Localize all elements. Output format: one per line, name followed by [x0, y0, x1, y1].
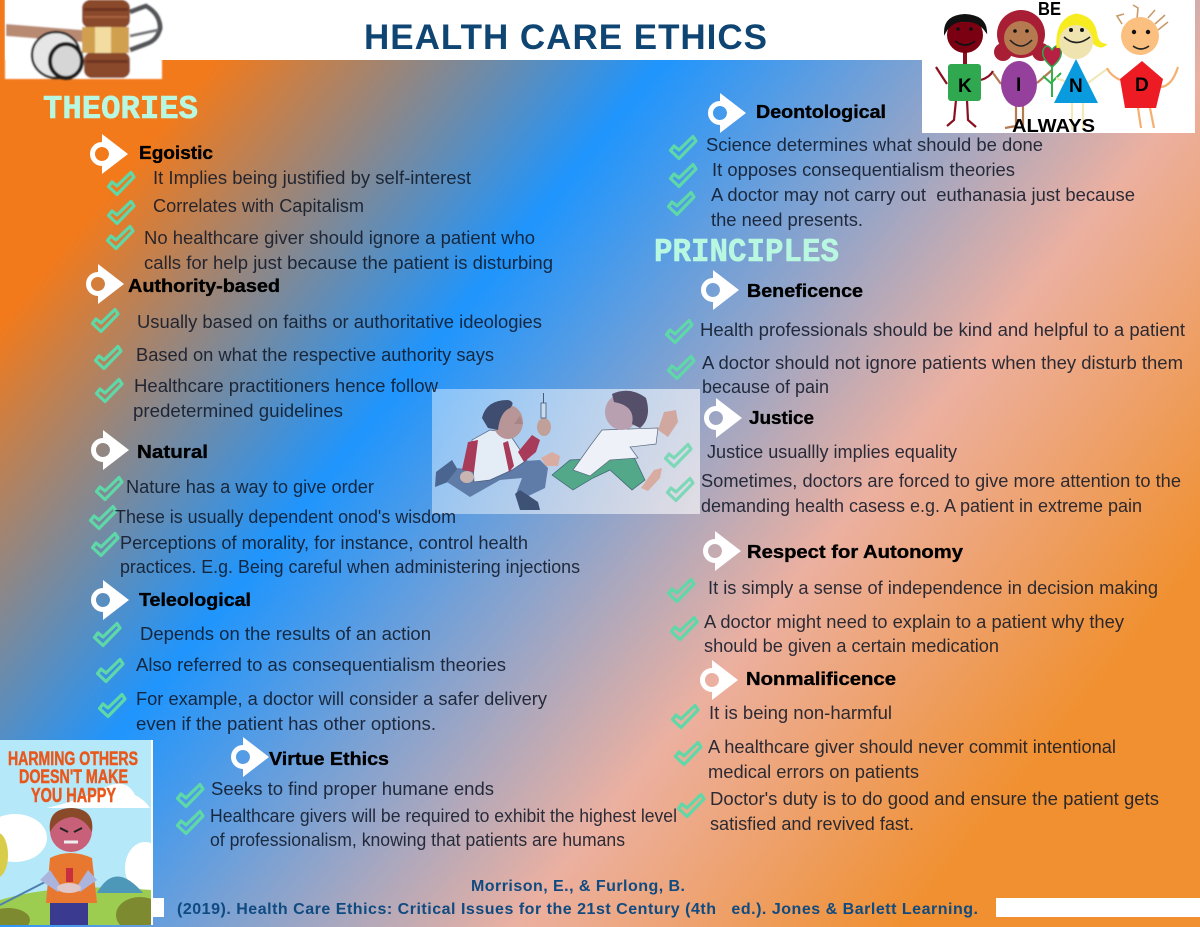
section: authority-based: Authority-based: [128, 276, 280, 296]
section: egoistic: Correlates with Capitalism: [153, 196, 364, 216]
figure I: I: [1016, 75, 1021, 96]
figure D: D: [1135, 75, 1149, 96]
section: respect for autonomy: Respect for Autonomy: [747, 542, 963, 562]
section: nonmalificence: A healthcare giver should never commit intentional: [708, 737, 1116, 757]
figure K: [936, 15, 993, 127]
section: justice: Justice usuallly implies equality: [707, 442, 957, 462]
section: authority-based: Based on what the respective authority says: [136, 345, 494, 365]
book title: HARMING OTHERS: [8, 749, 138, 770]
section: justice: Justice: [749, 408, 814, 428]
section: authority-based: Usually based on faiths or authoritative ideologies: [137, 312, 542, 332]
section: natural: These is usually dependent onod's wisdom: [115, 507, 456, 527]
section: deontological: Science determines what should be done: [706, 135, 1043, 155]
figure I: [993, 10, 1052, 128]
text: always: ALWAYS: [1012, 116, 1095, 136]
image: doctor chasing a patient with a syringe: [432, 389, 700, 514]
section: virtue ethics: [178, 737, 677, 850]
section: nonmalificence: medical errors on patients: [708, 762, 919, 782]
section: authority-based: predetermined guidelines: [133, 401, 343, 421]
section: respect for autonomy: A doctor might need to explain to a patient why they: [704, 612, 1124, 632]
doctor with syringe: [435, 393, 551, 510]
section: teleological: Depends on the results of an action: [140, 624, 431, 644]
bully boy: [40, 808, 97, 925]
section: beneficence: Health professionals should be kind and helpful to a patient: [700, 320, 1185, 340]
figure N: [1054, 15, 1107, 130]
section: authority-based: [88, 264, 542, 421]
section: virtue ethics: Healthcare givers will be required to exhibit the highest level: [210, 806, 677, 826]
section: egoistic: Egoistic: [139, 143, 213, 163]
section: nonmalificence: [672, 660, 1159, 834]
white header band: [5, 0, 922, 60]
footer citation: [177, 878, 978, 918]
footer citation: Morrison, E., & Furlong, B.: [471, 878, 685, 895]
section: deontological: Deontological: [756, 102, 886, 122]
section: respect for autonomy: It is simply a sense of independence in decision making: [708, 578, 1158, 598]
section: nonmalificence: Doctor's duty is to do good and ensure the patient gets: [710, 789, 1159, 809]
book title: DOESN'T MAKE: [19, 767, 128, 788]
section: egoistic: No healthcare giver should ignore a patient who: [144, 228, 535, 248]
section: teleological: [94, 580, 547, 734]
fleeing patient: [541, 391, 678, 491]
section: egoistic: calls for help just because the patient is disturbing: [144, 253, 553, 273]
section: nonmalificence: It is being non-harmful: [709, 703, 892, 723]
section: beneficence: Beneficence: [747, 281, 863, 301]
section: beneficence: A doctor should not ignore patients when they disturb them: [702, 353, 1183, 373]
section: nonmalificence: Nonmalificence: [746, 669, 896, 689]
figure D: [1107, 5, 1178, 128]
section: virtue ethics: of professionalism, knowing that patients are humans: [210, 830, 625, 850]
section: teleological: Teleological: [139, 590, 251, 610]
section: deontological: A doctor may not carry out euthanasia just because: [711, 185, 1135, 205]
image: be kind always: [922, 0, 1195, 136]
section: egoistic: It Implies being justified by self-interest: [153, 168, 471, 188]
heading: principles: PRINCIPLES: [654, 234, 839, 271]
section: justice: Sometimes, doctors are forced to give more attention to the: [701, 471, 1181, 491]
section: teleological: Also referred to as consequentialism theories: [136, 655, 506, 675]
image: book cover harming others: [0, 740, 165, 927]
section: virtue ethics: Virtue Ethics: [269, 749, 389, 769]
section: authority-based: Healthcare practitioners hence follow: [134, 376, 439, 396]
section: nonmalificence: satisfied and revived fast.: [710, 814, 914, 834]
book title: [8, 751, 138, 802]
heading: theories: THEORIES: [43, 91, 198, 128]
white footer blocks: [152, 898, 1200, 917]
section: natural: Natural: [137, 442, 208, 462]
section: respect for autonomy: should be given a certain medication: [704, 636, 999, 656]
section: natural: [90, 430, 580, 577]
image: gavel and stethoscope: [5, 0, 162, 79]
section: deontological: [668, 93, 1135, 230]
section: egoistic: [92, 134, 553, 273]
flower: [1043, 46, 1061, 97]
section: deontological: It opposes consequentialism theories: [712, 160, 1015, 180]
footer citation: (2019). Health Care Ethics: Critical Issues for the 21st Century (4th ed.). Jones & Barlett Learning.: [177, 901, 978, 918]
section: teleological: For example, a doctor will consider a safer delivery: [136, 689, 547, 709]
title: HEALTH CARE ETHICS: [364, 18, 767, 57]
section: teleological: even if the patient has other options.: [136, 714, 436, 734]
section: natural: Perceptions of morality, for instance, control health: [120, 533, 528, 553]
section: justice: demanding health casess e.g. A patient in extreme pain: [701, 496, 1142, 516]
clouds: [0, 784, 151, 890]
section: virtue ethics: Seeks to find proper humane ends: [211, 779, 494, 799]
section: beneficence: [666, 270, 1185, 397]
hill: [0, 888, 151, 925]
book title: YOU HAPPY: [31, 785, 116, 807]
figure N: N: [1069, 76, 1083, 97]
section: natural: Nature has a way to give order: [126, 477, 374, 497]
section: respect for autonomy: [668, 531, 1158, 656]
section: justice: [666, 398, 1181, 516]
section: deontological: the need presents.: [711, 210, 863, 230]
section: beneficence: because of pain: [702, 377, 829, 397]
figure K: K: [958, 76, 972, 97]
section: natural: practices. E.g. Being careful when administering injections: [120, 557, 580, 577]
